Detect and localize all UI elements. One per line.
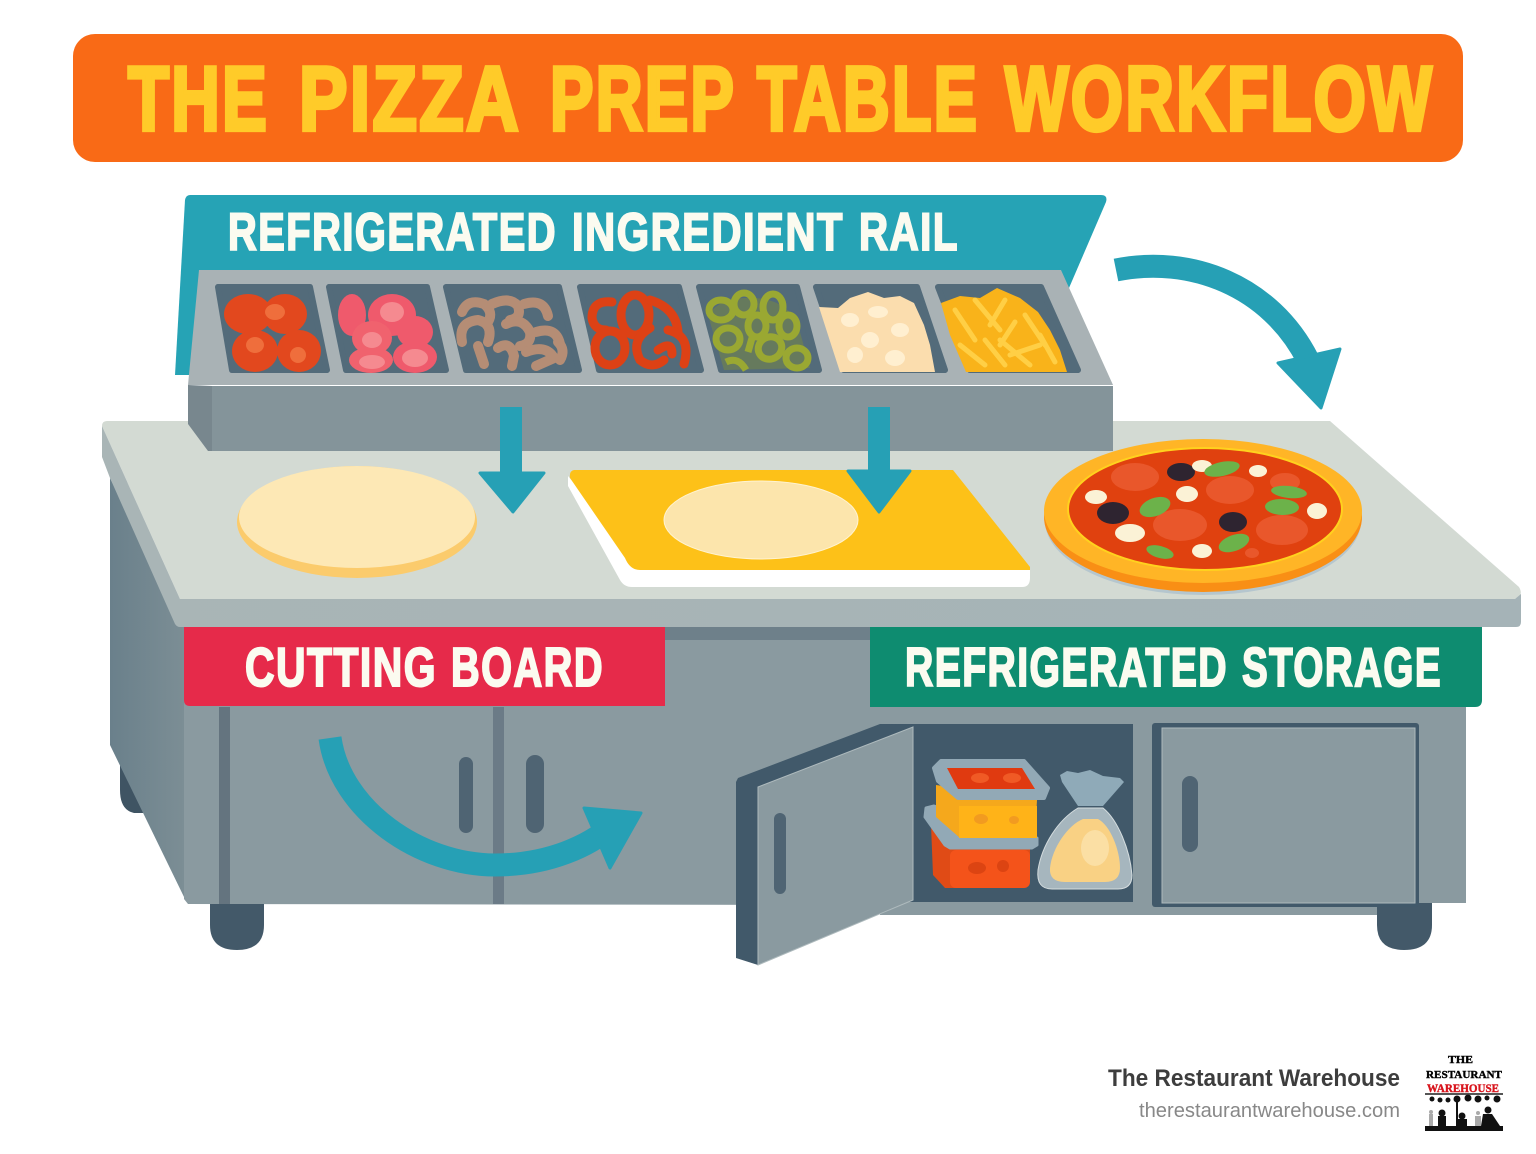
rail label: RAIL bbox=[859, 203, 959, 262]
open storage compartment bbox=[736, 724, 1151, 965]
title text: PREP bbox=[550, 49, 736, 150]
open door bbox=[736, 724, 915, 965]
teal ingredient rail banner bbox=[175, 195, 1106, 375]
rail front face bbox=[212, 386, 1113, 451]
logo bbox=[1425, 1054, 1503, 1131]
left cabinet doors bbox=[219, 707, 544, 904]
rail side face bbox=[188, 385, 212, 451]
front wheels bbox=[210, 903, 1432, 950]
cutting board label: CUTTING bbox=[245, 636, 437, 698]
cabinet front bbox=[184, 625, 1466, 915]
ingredient rail bbox=[188, 270, 1113, 451]
green olives bbox=[708, 293, 810, 370]
cabinet side bbox=[110, 478, 185, 899]
title text: TABLE bbox=[757, 49, 979, 150]
footer brand name: The Restaurant Warehouse bbox=[1108, 1065, 1400, 1092]
rail top face bbox=[188, 270, 1113, 385]
yellow cheese container bbox=[934, 761, 1048, 838]
refrigerated storage label: REFRIGERATED bbox=[905, 636, 1228, 698]
table front edge bbox=[102, 426, 1521, 627]
dough bag bbox=[1038, 770, 1132, 889]
title banner bbox=[73, 34, 1463, 162]
table top surface bbox=[102, 421, 1521, 599]
olives bbox=[1097, 463, 1247, 532]
footer URL: therestaurantwarehouse.com bbox=[1139, 1100, 1400, 1122]
mozzarella bbox=[819, 292, 935, 372]
pepperoni / tomato bbox=[224, 294, 321, 372]
refrigerated storage label: STORAGE bbox=[1242, 636, 1442, 698]
cheese pieces bbox=[1085, 460, 1327, 558]
pepperoni bbox=[1111, 463, 1308, 558]
red sauce container bbox=[925, 806, 1037, 888]
dough on board bbox=[664, 481, 858, 559]
rear wheel bbox=[120, 765, 143, 813]
curved arrow: rail to pizza bbox=[1116, 266, 1340, 408]
title text: PIZZA bbox=[299, 49, 521, 150]
shredded cheese bbox=[941, 288, 1067, 372]
refrigerated storage label bbox=[870, 627, 1482, 707]
rail label: INGREDIENT bbox=[572, 203, 844, 262]
ham bbox=[338, 294, 437, 373]
title text bbox=[128, 49, 1434, 150]
down arrow 2 bbox=[848, 407, 910, 512]
curved arrow: cutting board to storage bbox=[330, 738, 641, 868]
cutting board label: BOARD bbox=[451, 636, 604, 698]
logo: WAREHOUSE bbox=[1427, 1081, 1499, 1095]
logo: RESTAURANT bbox=[1426, 1069, 1503, 1081]
dough on counter bbox=[237, 466, 477, 578]
down arrow 1 bbox=[480, 407, 544, 512]
cutting board label bbox=[184, 627, 665, 706]
closed right door bbox=[1152, 723, 1419, 907]
rail label: REFRIGERATED bbox=[228, 203, 557, 262]
title text: THE bbox=[128, 49, 269, 150]
finished pizza bbox=[1044, 439, 1362, 595]
ingredient bins bbox=[218, 287, 1078, 370]
mushrooms bbox=[461, 300, 563, 366]
red peppers bbox=[592, 295, 686, 365]
rail label bbox=[228, 203, 959, 262]
cutting board bbox=[568, 470, 1030, 587]
prep table bbox=[102, 421, 1521, 950]
basil bbox=[1137, 458, 1308, 561]
logo: THE bbox=[1448, 1054, 1473, 1066]
